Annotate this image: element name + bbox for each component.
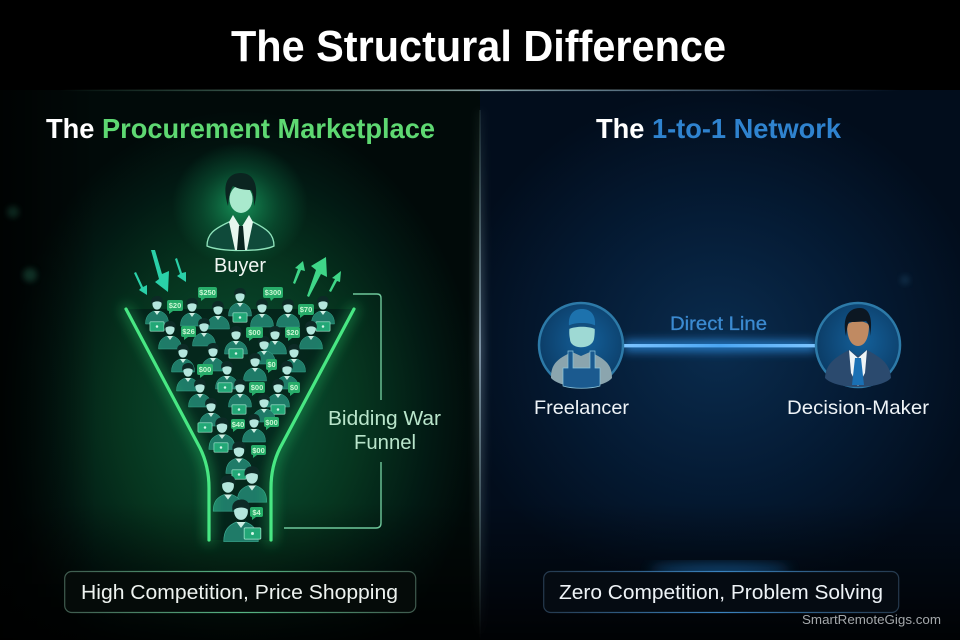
direct line bbox=[624, 341, 816, 351]
label: decision-maker: Decision-Maker bbox=[787, 397, 930, 419]
divider bbox=[476, 110, 484, 640]
funnel outline bbox=[126, 309, 354, 540]
bid bubbles: $0 bbox=[290, 383, 298, 392]
bid bubbles: $20 bbox=[169, 301, 181, 310]
label: buyer: Buyer bbox=[214, 255, 266, 277]
callout: high competition: High Competition, Price Shopping bbox=[81, 582, 398, 604]
panel: 1-to-1 network bbox=[534, 113, 930, 612]
title: The Structural Difference bbox=[231, 22, 726, 71]
bid bubbles: $00 bbox=[265, 418, 278, 427]
bid bubbles: $20 bbox=[286, 328, 299, 337]
callout: zero competition: Zero Competition, Problem Solving bbox=[559, 582, 883, 604]
label: bidding war funnel: Funnel bbox=[354, 432, 416, 454]
icon: freelancer bbox=[539, 303, 623, 388]
callout: high competition bbox=[65, 572, 416, 612]
heading: procurement marketplace: The Procurement Marketplace bbox=[46, 113, 435, 144]
bid bubbles: $0 bbox=[267, 360, 276, 369]
watermark: SmartRemoteGigs.com bbox=[802, 613, 941, 627]
label: bidding war funnel bbox=[328, 408, 441, 454]
arrows: outgoing bbox=[293, 257, 341, 297]
icon: buyer bbox=[172, 143, 308, 267]
label: direct line: Direct Line bbox=[670, 314, 767, 335]
funnel interior bbox=[126, 309, 354, 540]
bid bubbles: $00 bbox=[251, 383, 263, 392]
bid bubbles: $250 bbox=[199, 288, 216, 297]
funnel crowd bbox=[146, 288, 334, 542]
panel: procurement marketplace bbox=[46, 113, 441, 612]
bid bubbles: $00 bbox=[252, 446, 265, 455]
bid bubbles: $00 bbox=[199, 365, 211, 374]
bid bubbles: $26 bbox=[182, 327, 195, 336]
callout: zero competition bbox=[544, 564, 899, 612]
bid bubbles: $00 bbox=[248, 328, 261, 337]
bid bubbles: $4 bbox=[252, 508, 261, 517]
label: bidding war funnel: Bidding War bbox=[328, 408, 441, 430]
label: freelancer: Freelancer bbox=[534, 397, 630, 419]
bid bubbles: $40 bbox=[232, 420, 244, 429]
icon: decision-maker bbox=[816, 303, 900, 387]
bid bubbles: $300 bbox=[265, 288, 281, 297]
arrows: incoming bbox=[134, 250, 186, 295]
bracket bbox=[284, 294, 381, 528]
bid bubbles: $70 bbox=[300, 305, 312, 314]
bid bubbles bbox=[167, 287, 314, 520]
heading: 1-to-1 network: The 1-to-1 Network bbox=[596, 113, 841, 144]
